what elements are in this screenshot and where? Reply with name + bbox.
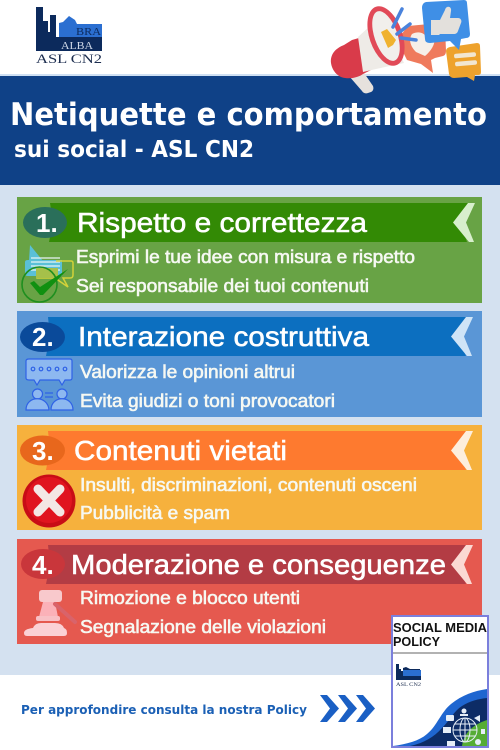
ribbon heading 2: 2. bbox=[32, 322, 54, 352]
logo: ASL CN2 bbox=[36, 7, 102, 66]
panel: 1. Rispetto e correttezza bbox=[17, 197, 482, 303]
icon: orange chat bubble bbox=[446, 43, 481, 81]
text: points 4: Segnalazione delle violazioni bbox=[80, 617, 326, 637]
document waves bbox=[393, 689, 487, 746]
icon: thumbs up bubble bbox=[422, 0, 470, 50]
header band bbox=[0, 76, 500, 185]
panel: 2. Interazione costruttiva bbox=[17, 311, 482, 417]
text: points 3: Insulti, discriminazioni, contenuti osceni bbox=[80, 475, 417, 495]
document: social media policy bbox=[392, 616, 488, 747]
ribbon heading 1 bbox=[23, 203, 475, 242]
ribbon heading 1: Rispetto e correttezza bbox=[77, 207, 367, 238]
logo: ASL CN2: ASL CN2 bbox=[36, 51, 102, 66]
text: points 1 bbox=[76, 247, 415, 296]
footer note: Per approfondire consulta la nostra Policy bbox=[21, 702, 307, 717]
text: points 2: Valorizza le opinioni altrui bbox=[80, 362, 295, 382]
ribbon heading 1: 1. bbox=[36, 208, 58, 238]
document small icons bbox=[443, 708, 485, 746]
icon: chat and two people bbox=[26, 359, 73, 410]
icon: heart bubble bbox=[397, 23, 446, 73]
panel: 4. Moderazione e conseguenze bbox=[17, 539, 482, 644]
text: points 3: Pubblicità e spam bbox=[80, 503, 230, 523]
text: points 2: Evita giudizi o toni provocatori bbox=[80, 391, 335, 411]
icon: red cross bbox=[22, 474, 76, 528]
ribbon heading 2 bbox=[20, 317, 473, 356]
text: points 2 bbox=[80, 362, 335, 411]
document logo: ASL CN2 bbox=[396, 682, 421, 688]
title bbox=[10, 97, 487, 163]
panel: 3. Contenuti vietati bbox=[17, 425, 482, 530]
logo: ASL CN2: BRA bbox=[76, 27, 102, 38]
ribbon heading 2: Interazione costruttiva bbox=[78, 321, 369, 352]
ribbon heading 3: 3. bbox=[32, 436, 54, 466]
document globe bbox=[453, 718, 477, 742]
illustration: megaphone and social reactions bbox=[331, 0, 481, 93]
icon: megaphone bbox=[331, 1, 416, 93]
document: social media policy: SOCIAL MEDIA bbox=[393, 621, 487, 635]
arrows bbox=[320, 695, 375, 722]
logo: ASL CN2: ALBA bbox=[61, 41, 94, 52]
text: points 1: Sei responsabile dei tuoi contenuti bbox=[76, 276, 369, 296]
text: points 4: Rimozione e blocco utenti bbox=[80, 588, 300, 608]
text: points 1: Esprimi le tue idee con misura e rispetto bbox=[76, 247, 415, 267]
ribbon heading 4: 4. bbox=[32, 550, 54, 580]
ribbon heading 3: Contenuti vietati bbox=[74, 435, 287, 466]
ribbon heading 3 bbox=[20, 431, 473, 470]
document: social media policy: POLICY bbox=[393, 635, 441, 649]
text: points 3 bbox=[80, 475, 417, 523]
icon: speech bubbles with check bbox=[22, 245, 73, 302]
ribbon heading 4 bbox=[21, 545, 473, 584]
text: points 4 bbox=[80, 588, 326, 637]
ribbon heading 4: Moderazione e conseguenze bbox=[71, 549, 446, 580]
title: sui social - ASL CN2 bbox=[14, 137, 254, 163]
icon: gavel bbox=[24, 590, 75, 636]
